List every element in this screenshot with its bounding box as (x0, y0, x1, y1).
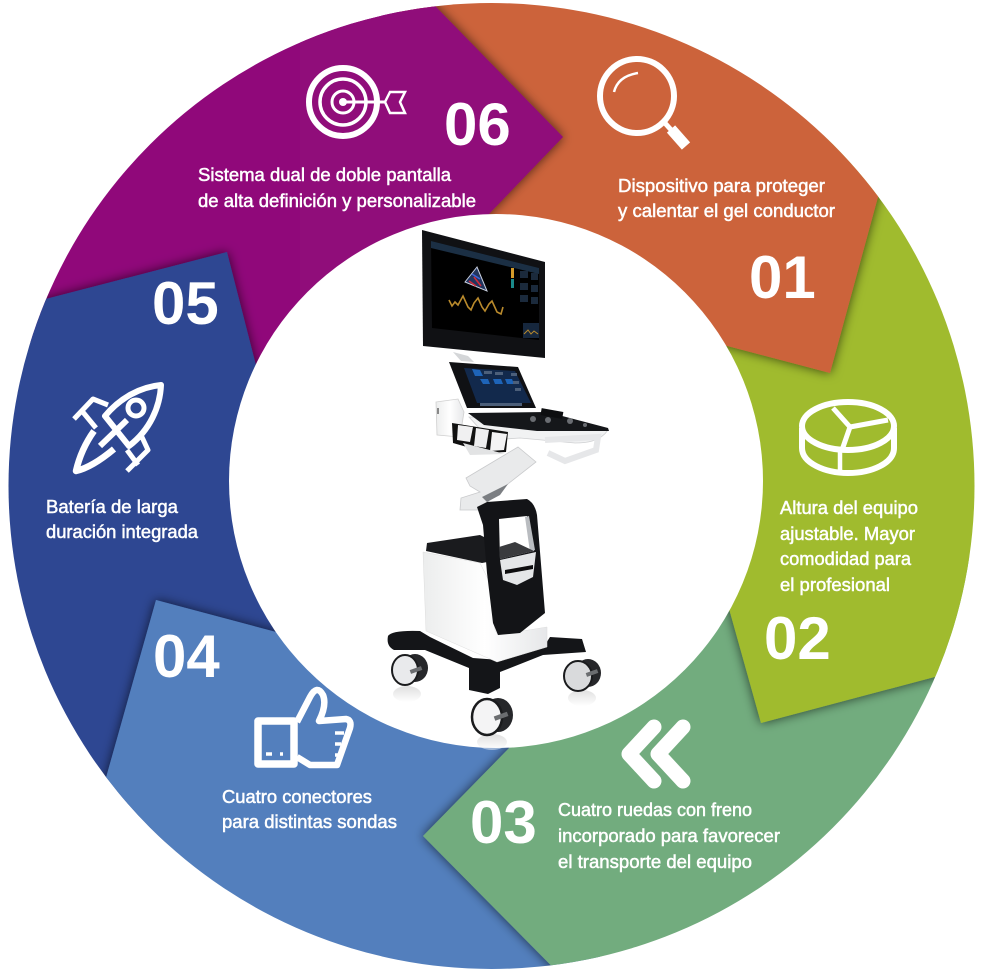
wheel reflections (393, 686, 596, 750)
wheel: centre (472, 698, 513, 735)
text: feature 02: Altura del equipo (780, 497, 918, 518)
segment 03: green (423, 560, 1000, 978)
wheel: left (392, 654, 428, 685)
colour bars (511, 268, 514, 278)
icon: magnifying glass (600, 59, 686, 146)
text: feature 05 (46, 496, 199, 542)
segment 05: navy (8, 247, 276, 846)
heart sector scan (465, 267, 487, 291)
text: feature 06 (198, 164, 476, 211)
text: feature 03: el transporte del equipo (558, 851, 752, 872)
text: feature 01 (618, 175, 835, 221)
segment 06 top: purple overlap on orange (300, 6, 568, 234)
cart shelf (426, 535, 540, 563)
monitor neck (453, 352, 474, 362)
text: feature 02: ajustable. Mayor (780, 523, 915, 544)
number 05: 05 (152, 270, 219, 337)
monitor (422, 230, 545, 358)
text: feature 03: Cuatro ruedas con freno (558, 799, 752, 820)
central white circle (229, 214, 763, 748)
number 06: 06 (444, 91, 511, 158)
text: feature 01: Dispositivo para proteger (618, 175, 825, 196)
icon: double chevron (629, 727, 683, 781)
text: feature 03: incorporado para favorecer (558, 825, 780, 846)
text: feature 06: Sistema dual de doble pantalla (198, 164, 452, 185)
control deck (468, 408, 609, 461)
text: feature 03 (558, 799, 780, 872)
segment 04: blue (80, 600, 600, 978)
probe cups (452, 423, 508, 455)
ultrasound device illustration (388, 230, 609, 750)
number 04: 04 (153, 623, 220, 690)
icon: thumbs up (258, 690, 350, 765)
probe gel holder (436, 399, 464, 437)
touch screen tablet (449, 362, 536, 408)
doppler trace (449, 296, 503, 314)
text: feature 04 (222, 786, 397, 832)
thumbnails (520, 271, 538, 304)
text: feature 01: y calentar el gel conductor (618, 200, 835, 221)
text: feature 06: de alta definición y personalizable (198, 190, 476, 211)
cart base (388, 631, 586, 694)
icon: target with arrow (309, 68, 405, 136)
text: feature 05: Batería de larga (46, 496, 179, 517)
text: feature 02: comodidad para (780, 548, 912, 569)
icon: rocket (74, 385, 161, 471)
number 01: 01 (749, 244, 816, 311)
segment 01: orange (400, 0, 905, 373)
support arm (460, 447, 536, 510)
text: feature 02 (780, 497, 918, 595)
text: feature 04: para distintas sondas (222, 811, 397, 832)
segment 06 base: purple (30, 6, 436, 365)
cart white body (423, 552, 547, 662)
icon: pie chart cylinder (802, 402, 894, 473)
number 02: 02 (764, 605, 831, 672)
cart black tower (477, 499, 545, 635)
segment 02: olive (724, 136, 974, 728)
wheel: right (564, 659, 601, 691)
text: feature 02: el profesional (780, 574, 890, 595)
text: feature 04: Cuatro conectores (222, 786, 372, 807)
number 03: 03 (470, 789, 537, 856)
text: feature 05: duración integrada (46, 521, 199, 542)
